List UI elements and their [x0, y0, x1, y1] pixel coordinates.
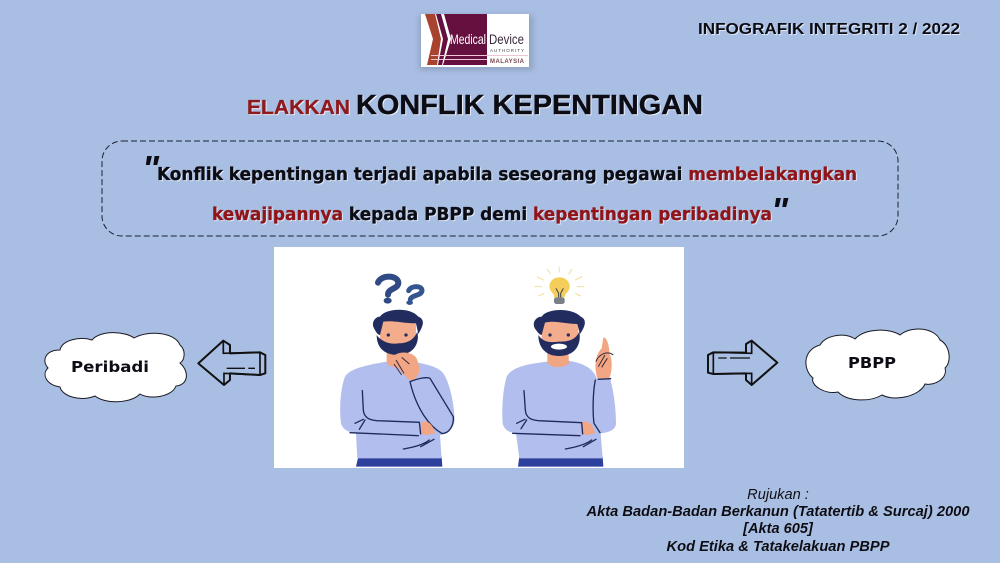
logo: Medical Device Authority Malaysia: MALAYSIA: [490, 59, 525, 65]
opening quotation mark: ": [142, 148, 160, 189]
cloud label: Peribadi: [71, 358, 149, 376]
quote line 1: Konflik kepentingan terjadi apabila seseorang pegawai membelakangkan: [157, 164, 857, 185]
figure: thinking man with question marks: [340, 277, 455, 467]
reference block: [585, 487, 970, 555]
logo: Medical Device Authority Malaysia: [419, 14, 533, 70]
logo: Medical Device Authority Malaysia: Device: [489, 31, 524, 47]
logo: Medical Device Authority Malaysia: Medical: [450, 31, 486, 47]
reference block: Rujukan :: [747, 487, 809, 503]
cloud: PBPP: [806, 329, 949, 400]
icon: light bulb: [535, 267, 584, 304]
quote panel: [102, 141, 898, 236]
arrow: pointing left: [198, 341, 265, 385]
quote line 2: kewajipannya kepada PBPP demi kepentingan peribadinya: [212, 204, 772, 225]
image panel: two men: [274, 247, 684, 468]
reference block: Akta Badan-Badan Berkanun (Tatatertib & Surcaj) 2000: [585, 504, 970, 520]
cloud label: PBPP: [848, 354, 896, 372]
header label: infografik integriti: INFOGRAFIK INTEGRITI 2 / 2022: [698, 21, 960, 38]
cloud: Peribadi: [45, 333, 186, 402]
figure: man with light bulb: [502, 267, 616, 467]
title: KONFLIK KEPENTINGAN: [356, 89, 703, 120]
logo: Medical Device Authority Malaysia: AUTHORITY: [490, 48, 524, 53]
icon: question marks: [378, 277, 422, 299]
reference block: Kod Etika & Tatakelakuan PBPP: [666, 539, 890, 555]
reference block: [Akta 605]: [742, 521, 814, 537]
closing quotation mark: ": [771, 190, 789, 231]
arrow: pointing right: [708, 341, 777, 385]
title: ELAKKAN: [247, 97, 350, 119]
